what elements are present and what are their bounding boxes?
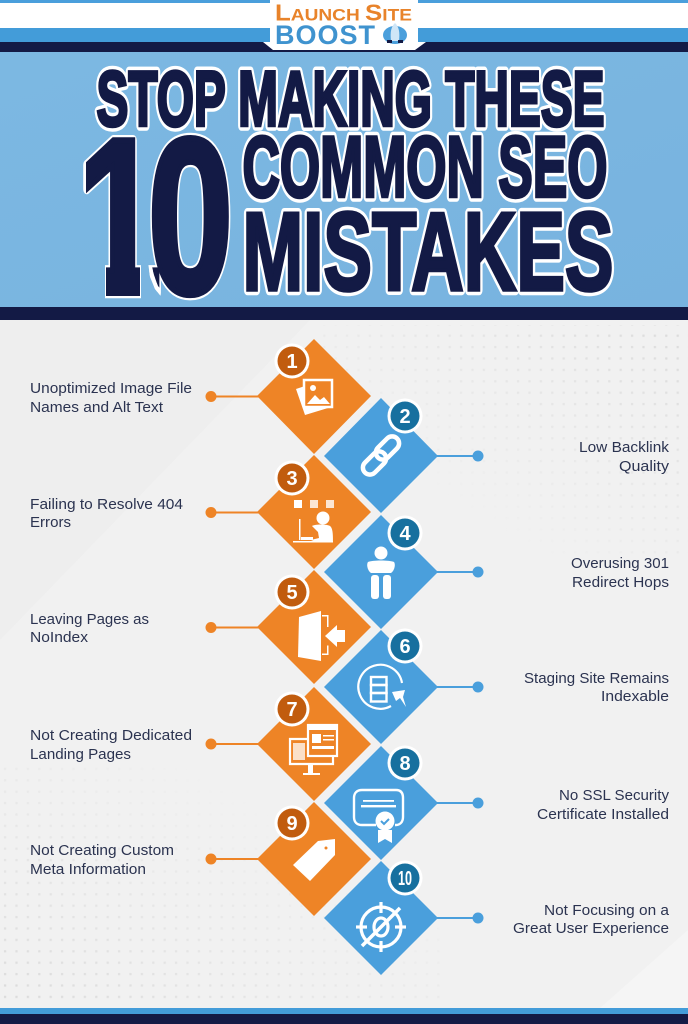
item 5: 5 (286, 582, 298, 604)
item 8: Certificate Installed (537, 806, 669, 823)
item 8 (324, 746, 669, 860)
item 7 (30, 687, 371, 801)
item 4: 4 (399, 523, 411, 545)
icon: crossed-out target (356, 902, 406, 952)
item 6: Indexable (601, 688, 669, 705)
item 6: 6 (399, 636, 411, 658)
title: 10 (76, 93, 233, 341)
logo (263, 0, 426, 50)
background shading and dot patterns (0, 320, 688, 1008)
icon: server with refresh arrow (358, 665, 406, 709)
item 3: Failing to Resolve 404 (30, 496, 183, 513)
item 9: 9 (286, 813, 298, 835)
item 2: Low Backlink (579, 439, 670, 456)
item 10: Not Focusing on a (544, 902, 670, 919)
item 2: Quality (619, 458, 670, 475)
item 10 (324, 860, 670, 975)
icon: images (296, 380, 332, 415)
icon: chain link (360, 434, 402, 477)
icon: certificate (354, 790, 403, 843)
item 9: Not Creating Custom (30, 842, 174, 859)
item 2 (324, 398, 670, 513)
icon: person with hands on head (367, 546, 395, 599)
item 3: Errors (30, 514, 71, 531)
item 1 (30, 339, 371, 454)
item 4: Redirect Hops (572, 574, 669, 591)
item 1: Names and Alt Text (30, 399, 164, 416)
top header stripes (0, 0, 688, 52)
title (83, 66, 614, 300)
item 6 (324, 628, 669, 744)
item 8: No SSL Security (559, 787, 669, 804)
item 4 (324, 515, 669, 629)
item 1: Unoptimized Image File (30, 380, 192, 397)
item 4: Overusing 301 (571, 555, 669, 572)
icon: person at laptop with error boxes (293, 500, 334, 542)
item 5: NoIndex (30, 629, 89, 646)
item 9 (30, 802, 371, 916)
logo: BOOST (275, 20, 376, 50)
item 9: Meta Information (30, 861, 146, 878)
item 2: 2 (399, 406, 411, 428)
navy band under hero (0, 307, 688, 320)
bottom footer stripes (0, 1008, 688, 1024)
item 10: Great User Experience (513, 920, 669, 937)
item 3 (30, 455, 371, 569)
item 6: Staging Site Remains (524, 670, 669, 687)
item 8: 8 (399, 753, 411, 775)
item 7: 7 (286, 699, 298, 721)
item 5: Leaving Pages as (30, 611, 149, 628)
icon: monitors with landing pages (290, 725, 337, 775)
icon: door with arrow (298, 611, 345, 661)
item 3: 3 (286, 468, 298, 490)
icon: price tag (293, 839, 335, 881)
item 5 (30, 570, 371, 684)
logo: LAUNCH SITE (275, 0, 412, 26)
icon: rocket (383, 23, 407, 44)
item 7: Not Creating Dedicated (30, 727, 192, 744)
item 1: 1 (286, 351, 298, 373)
hero banner (0, 52, 688, 307)
item 10: 10 (398, 868, 412, 890)
title: 10 (76, 93, 233, 341)
item 7: Landing Pages (30, 746, 131, 763)
